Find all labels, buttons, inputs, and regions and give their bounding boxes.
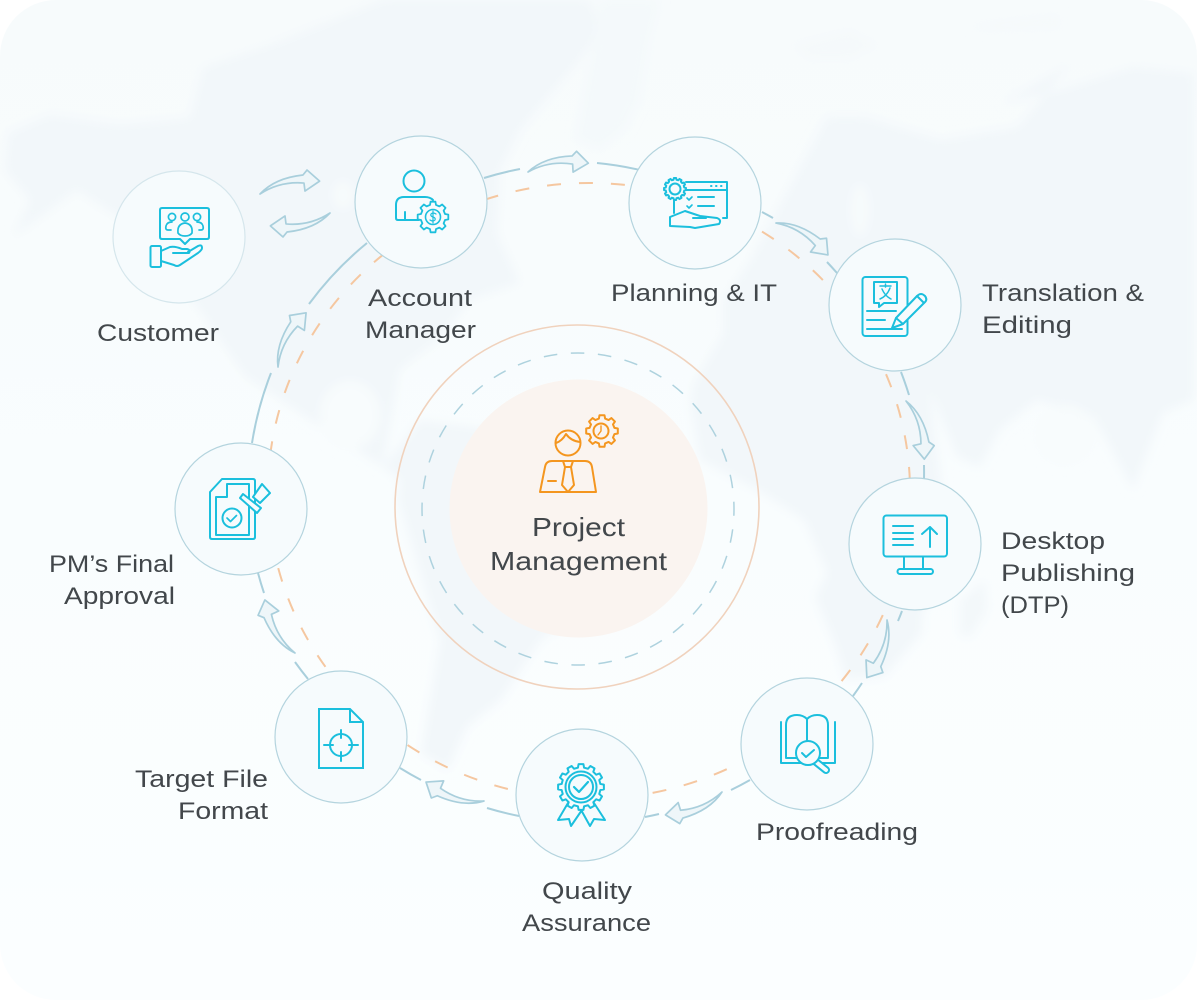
- label: target file format: Target File: [135, 766, 268, 793]
- label: target file format: [135, 766, 268, 825]
- label: target file format: Format: [178, 798, 268, 825]
- node: customer: [113, 171, 245, 303]
- label: pm final approval: Approval: [64, 583, 175, 610]
- label: quality assurance: [522, 878, 651, 937]
- node: planning and it: [629, 137, 761, 269]
- label: account manager: Manager: [365, 317, 476, 344]
- label: customer: Customer: [97, 320, 219, 347]
- hub dashed ring: [422, 353, 734, 665]
- icon: target file: [319, 709, 363, 768]
- label: account manager: Account: [368, 285, 472, 312]
- arrow: customer to account manager: [257, 168, 321, 200]
- label: quality assurance: Quality: [542, 878, 632, 905]
- arrow: proofreading to quality: [663, 786, 727, 827]
- icon: planning: [664, 178, 727, 228]
- arrow: translation to dtp: [900, 397, 937, 461]
- label: translation and editing: Translation &: [982, 280, 1144, 307]
- hub label: Project: [532, 512, 626, 542]
- node: proofreading: [741, 678, 873, 810]
- node: target file format: [275, 671, 407, 803]
- arrow: planning to translation: [773, 212, 835, 261]
- label: translation and editing: Editing: [982, 312, 1072, 339]
- arrow: dtp to proofreading: [861, 618, 900, 682]
- arrow: account manager to planning: [526, 150, 589, 179]
- hub label: [490, 512, 668, 576]
- label: planning and it: Planning & IT: [611, 280, 777, 307]
- arrow: final approval to account manager: [266, 307, 312, 370]
- label: proofreading: Proofreading: [756, 819, 918, 846]
- node: translation and editing: [829, 239, 961, 371]
- arrow: quality to target file: [422, 776, 486, 814]
- label: desktop publishing: (DTP): [1001, 592, 1069, 619]
- hub inner disc: [450, 380, 708, 638]
- solid ring segments: [252, 163, 924, 817]
- icon: quality badge: [558, 764, 605, 826]
- panel: project management hub: [395, 325, 759, 689]
- node: pm final approval: [175, 443, 307, 575]
- icon: book and magnifier: [781, 715, 835, 770]
- icon: translation: [862, 277, 926, 336]
- label: desktop publishing: Publishing: [1001, 560, 1135, 587]
- label: translation and editing: [982, 280, 1144, 339]
- node: desktop publishing: [849, 478, 981, 610]
- icon: customer hand with people: [150, 208, 209, 267]
- node: account manager: [355, 136, 487, 268]
- label: account manager: [365, 285, 476, 344]
- arrow: target file to final approval: [253, 597, 301, 660]
- label: desktop publishing: Desktop: [1001, 528, 1105, 555]
- outer dashed orange ring: [268, 183, 910, 799]
- world map: [5, 0, 1194, 770]
- label: quality assurance: Assurance: [522, 910, 651, 937]
- label: pm final approval: [49, 551, 175, 610]
- icon: approval stamp: [210, 479, 270, 539]
- label: pm final approval: PM’s Final: [49, 551, 174, 578]
- node: quality assurance: [516, 729, 648, 861]
- icon: monitor: [884, 516, 947, 574]
- hub label: Management: [490, 546, 668, 576]
- arrow: account manager to customer: [269, 207, 333, 239]
- hub outer ring: [395, 325, 759, 689]
- icon: account manager: [396, 170, 448, 232]
- icon: manager with gear: [540, 415, 618, 492]
- label: desktop publishing: [1001, 528, 1135, 619]
